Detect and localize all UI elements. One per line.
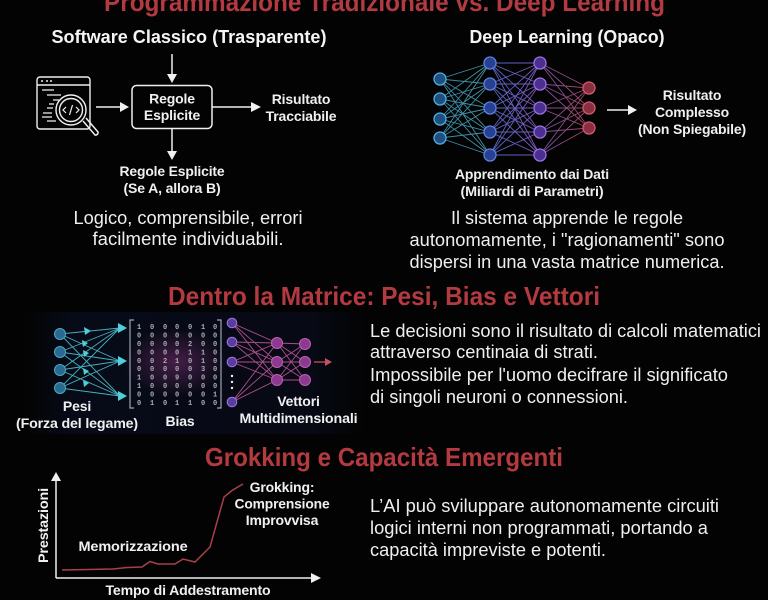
text: le decisioni: Le decisioni sono il risultato di calcoli matematici (370, 321, 761, 341)
panel: matrix diagram (16, 312, 365, 434)
matrix of numbers: 0000110 (137, 350, 217, 358)
matrix of numbers (130, 320, 221, 408)
label: grokking comprensione improvvisa (234, 479, 330, 528)
label: regole esplicite se a allora b: (Se A, allora B) (124, 180, 220, 196)
icon: code window with magnifier (37, 77, 98, 135)
label: vettori multidimensionali (240, 393, 358, 426)
label: vettori multidimensionali: Multidimensionali (240, 410, 358, 426)
text: il sistema apprende: dispersi in una vasta matrice numerica. (410, 252, 724, 272)
label: apprendimento dai dati (455, 166, 609, 199)
arrow: rules downward (167, 129, 177, 160)
chart: grokking curve (35, 472, 330, 598)
box: regole esplicite: Regole (149, 90, 195, 106)
heading: software classico: Software Classico (Trasparente) (52, 27, 326, 47)
label: risultato complesso: Risultato (663, 87, 721, 103)
vectors network (227, 318, 310, 407)
label: apprendimento dai dati: (Miliardi di Parametri) (460, 183, 604, 199)
text: logico comprensibile: Logico, comprensibile, errori (74, 208, 302, 228)
heading: grokking: Grokking e Capacità Emergenti (205, 442, 563, 472)
text: le decisioni: attraverso centinaia di strati. (370, 342, 598, 362)
arrow: network to result (607, 105, 637, 115)
panel: software classico (37, 27, 337, 249)
label: regole esplicite se a allora b: Regole Esplicite (120, 163, 225, 179)
label: risultato tracciabile (266, 91, 337, 124)
weights network (54, 323, 127, 401)
label: apprendimento dai dati: Apprendimento dai Dati (455, 166, 609, 182)
text: l'AI puo sviluppare (370, 496, 719, 560)
label: grokking comprensione improvvisa: Comprensione (234, 496, 330, 512)
performance line (62, 484, 243, 570)
label: regole esplicite se a allora b (120, 163, 225, 196)
text: le decisioni: Impossibile per l'uomo decifrare il significato (370, 365, 728, 385)
label: risultato tracciabile: Risultato (272, 91, 330, 107)
label: bias: Bias (166, 413, 195, 429)
heading: dentro la matrice: Dentro la Matrice: Pesi, Bias e Vettori (168, 281, 600, 311)
text: il sistema apprende: autonomamente, i "ragionamenti" sono (410, 230, 724, 250)
arrow: vectors output (314, 358, 332, 366)
label: pesi: Pesi (63, 398, 91, 414)
text: l'AI puo sviluppare: L’AI può sviluppare autonomamente circuiti (370, 496, 719, 516)
matrix of numbers: 0101100 (137, 400, 217, 408)
neural network diagram (434, 57, 595, 161)
text: le decisioni: di singoli neuroni o connessioni. (370, 387, 628, 407)
label: grokking comprensione improvvisa: Grokking: (250, 479, 314, 495)
arrow: into rules from top (167, 54, 177, 83)
x axis label: Tempo di Addestramento (106, 582, 270, 598)
text: l'AI puo sviluppare: logici interni non programmati, portando a (370, 518, 709, 538)
text: l'AI puo sviluppare: capacità impreviste e potenti. (370, 540, 606, 560)
matrix of numbers: 0000001 (137, 392, 217, 400)
panel: deep learning (410, 27, 746, 272)
heading: deep learning: Deep Learning (Opaco) (470, 27, 665, 47)
matrix of numbers: 0000030 (137, 366, 217, 374)
label: risultato complesso (638, 87, 746, 137)
label: risultato complesso: (Non Spiegabile) (638, 121, 746, 137)
text: logico comprensibile: facilmente individuabili. (92, 229, 284, 249)
arrow: icon to rules (96, 102, 129, 112)
matrix of numbers: 0000200 (137, 341, 217, 349)
matrix of numbers: 1000010 (137, 324, 217, 332)
axes (51, 472, 321, 583)
matrix of numbers: 0021010 (137, 358, 217, 366)
label: grokking comprensione improvvisa: Improvvisa (246, 512, 319, 528)
matrix of numbers: 1009000 (137, 374, 217, 382)
text: le decisioni (370, 321, 761, 407)
text: il sistema apprende (410, 208, 724, 272)
matrix of numbers: 0000000 (137, 332, 217, 340)
matrix of numbers: 1000000 (137, 383, 217, 391)
label: risultato tracciabile: Tracciabile (266, 108, 337, 124)
label: risultato complesso: Complesso (655, 104, 729, 120)
label: pesi (16, 398, 138, 431)
text: logico comprensibile (74, 208, 302, 249)
label: pesi: (Forza del legame) (16, 415, 138, 431)
label: vettori multidimensionali: Vettori (277, 393, 320, 409)
label: memorizzazione: Memorizzazione (78, 538, 188, 554)
box: regole esplicite: Esplicite (144, 107, 200, 123)
text: il sistema apprende: Il sistema apprende le regole (451, 208, 683, 228)
arrow: rules to result (212, 102, 261, 112)
box: regole esplicite (132, 86, 212, 128)
y axis label: Prestazioni (35, 488, 51, 563)
